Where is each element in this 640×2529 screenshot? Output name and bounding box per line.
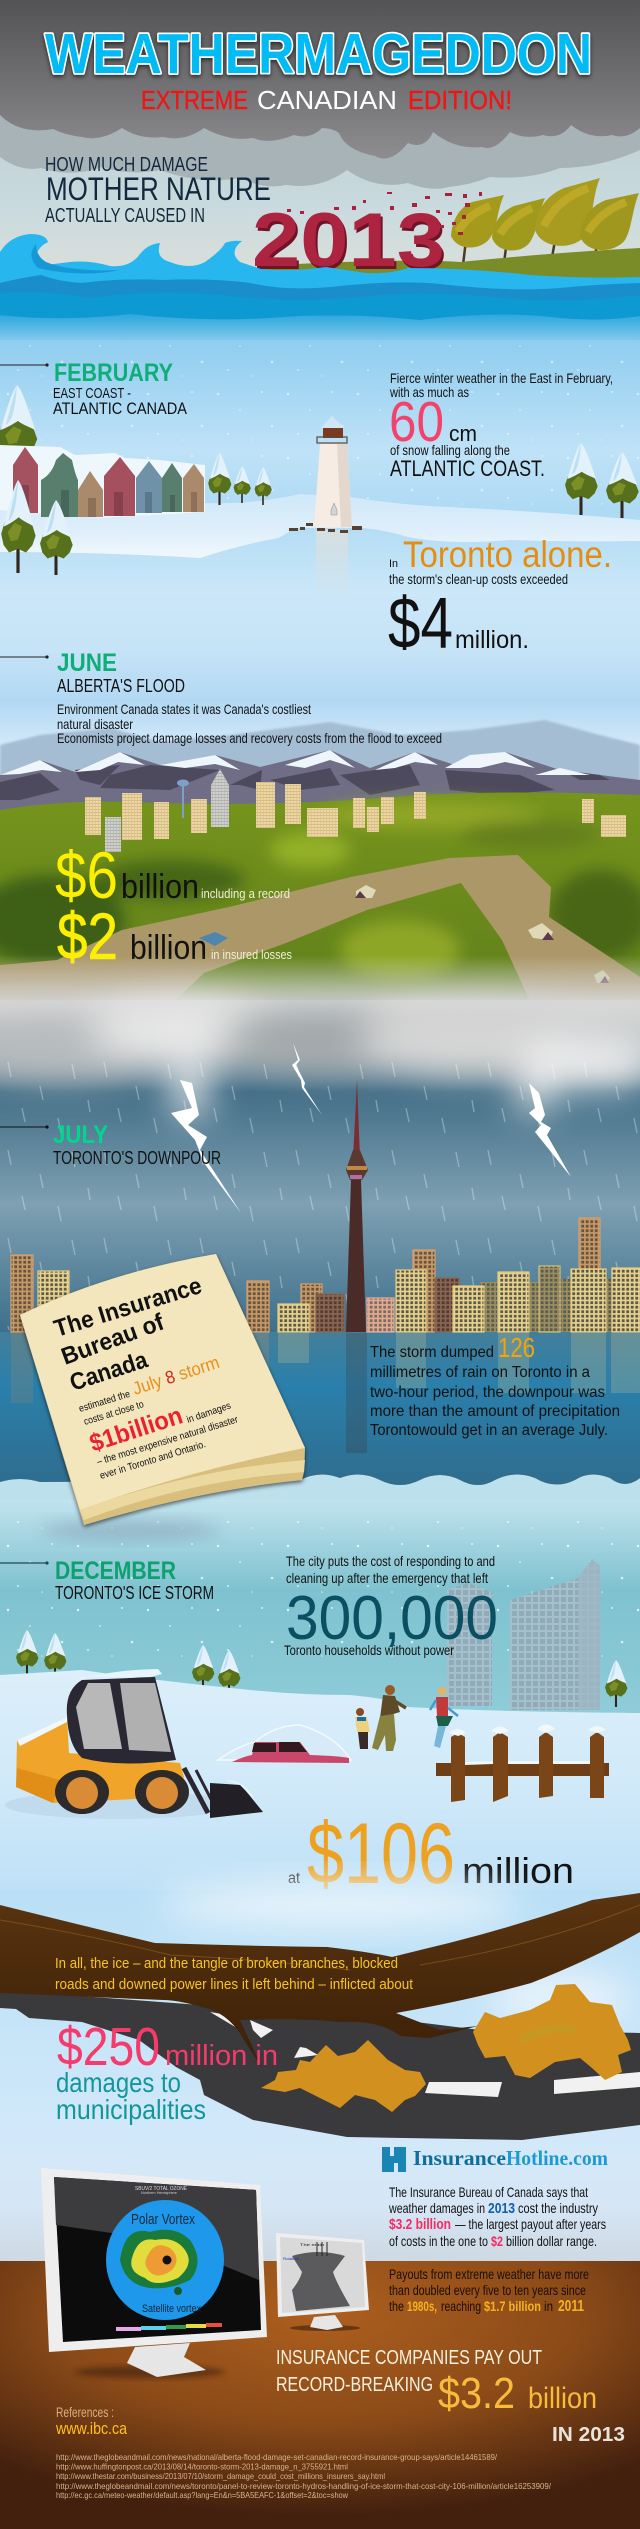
body text: IBC payout: 2013: [488, 2200, 515, 2217]
stat: $2 billion: billion: [130, 929, 207, 967]
subtitle: [141, 85, 512, 115]
stat: $6 billion: $6: [55, 838, 118, 912]
large monitor: polar vortex: [41, 2168, 267, 2378]
snow loader: [5, 1669, 263, 1819]
small monitor: vortex diagram: Rotation: [283, 2256, 299, 2261]
headline: record-breaking payout: INSURANCE COMPANIES PAY OUT: [276, 2347, 542, 2369]
road markings: [210, 2012, 640, 2097]
heading: December: DECEMBER: [55, 1557, 176, 1585]
flood water: [0, 1332, 640, 1485]
heading: July: JULY: [53, 1121, 108, 1149]
ozone map: [106, 2200, 224, 2320]
heading: February: EAST COAST -: [53, 385, 131, 402]
3D year 2013: 2013: [252, 198, 445, 283]
callout: 60 cm of snow: [389, 370, 613, 481]
callout: 60 cm of snow: cm: [449, 421, 477, 446]
stat: $2 billion: $2: [57, 899, 118, 973]
snowy trees: [16, 1630, 627, 1707]
source URLs: http://www.huffingtonpost.ca/2013/08/14/toronto-storm-2013-damage_n_3755921.html: [56, 2462, 348, 2472]
small monitor: vortex diagram: The main: [300, 2242, 324, 2247]
stat: $250 million: municipalities: [56, 2094, 206, 2125]
body text: IBC payout: billion dollar range.: [506, 2233, 597, 2249]
intro heading: ACTUALLY CAUSED IN: [45, 205, 205, 227]
stat: 300,000 households: 300,000: [286, 1584, 498, 1653]
callout: Toronto alone $4 million: million.: [455, 626, 529, 654]
heading: July: [0, 1121, 221, 1168]
orange leaf clumps: [261, 1984, 631, 2112]
stat: 300,000 households: Toronto households without power: [284, 1642, 454, 1658]
snowy trees left: [1, 453, 272, 575]
callout: 60 cm of snow: 60: [389, 390, 444, 454]
muddy flood river: [0, 855, 640, 1012]
source URLs: [56, 2452, 552, 2500]
stat: $6 billion: [55, 838, 290, 912]
wooden fence: [436, 1724, 609, 1802]
logo: InsuranceHotline.com: Hotline.com: [506, 2146, 608, 2170]
grass strip: [258, 248, 640, 300]
stat: 300,000 households: The city puts the cost of responding to and: [286, 1553, 495, 1569]
callout: 60 cm of snow: with as much as: [389, 384, 469, 400]
booklet text: estimated the: [78, 1389, 132, 1415]
callout: 60 cm of snow: of snow falling along the: [390, 442, 510, 458]
panel: February, East Coast: [0, 340, 640, 664]
callout: 60 cm of snow: ATLANTIC COAST.: [390, 456, 545, 481]
stat: $250 million: damages to: [56, 2067, 181, 2098]
stat: $106 million: million: [462, 1850, 574, 1891]
body text: costliest disaster: [57, 701, 442, 746]
subtitle: EDITION!: [408, 85, 512, 115]
body text: IBC payout: $3.2 billion: [389, 2216, 451, 2233]
stat: 126 millimetres: more than the amount of precipitation: [370, 1403, 620, 1420]
logo: InsuranceHotline.com: Insurance: [413, 2146, 506, 2170]
callout: Toronto alone $4 million: the storm's clean-up costs exceeded: [389, 571, 568, 587]
booklet text: ever in Toronto and Ontario.: [99, 1439, 207, 1482]
panel: header and storm clouds: [0, 0, 640, 345]
headline: record-breaking payout: [276, 2347, 625, 2446]
road: [0, 1990, 640, 2140]
body text: payouts doubled: than doubled every five to ten years since: [389, 2282, 586, 2298]
ocean waves: [0, 234, 640, 345]
snowfield: [0, 1670, 640, 1910]
dark cloud band: [0, 0, 640, 159]
colour scale: [116, 2323, 222, 2331]
headline: record-breaking payout: billion: [528, 2382, 597, 2415]
3D year 2013: 2013: [254, 201, 447, 286]
ozone map: Polar Vortex: [131, 2211, 195, 2228]
stat: $250 million: $250: [57, 2017, 160, 2077]
body text: payouts doubled: [389, 2266, 589, 2315]
booklet text: $1billion: [86, 1401, 186, 1458]
headline: record-breaking payout: $3.2: [438, 2369, 515, 2418]
heading: June: [0, 649, 185, 696]
family in the snow: [355, 1685, 458, 1751]
lighthouse: [289, 416, 362, 600]
text on branch: roads and downed power lines it left behind – inflicted about: [55, 1976, 414, 1993]
booklet shadow: [40, 1520, 220, 1540]
booklet text: Canada: [67, 1346, 152, 1397]
body text: IBC payout: cost the industry: [518, 2200, 598, 2216]
body text: IBC payout: $2: [491, 2233, 503, 2249]
CN Tower: [346, 1080, 368, 1332]
source URLs: http://ec.gc.ca/meteo-weather/default.asp?lang=En&n=5BA5EAFC-1&offset=2&toc=show: [56, 2490, 349, 2500]
storm clouds: [0, 1000, 640, 1118]
ozone map: Satellite vortex: [142, 2303, 201, 2315]
text on branch: [55, 1955, 414, 1993]
stat: 126 millimetres: millimetres of rain on Toronto in a: [370, 1364, 590, 1381]
booklet text: [51, 1272, 240, 1482]
body text: payouts doubled: in: [544, 2298, 553, 2314]
snowy ground: [0, 494, 640, 558]
stat: 126 millimetres: 126: [498, 1332, 535, 1363]
stat: 126 millimetres: Torontowould get in an average July.: [370, 1422, 608, 1439]
body text: payouts doubled: the: [389, 2298, 404, 2314]
body text: payouts doubled: 1980s,: [407, 2298, 437, 2314]
heading: February: FEBRUARY: [54, 359, 173, 387]
forest texture: [0, 801, 640, 980]
snow-buried car: [218, 1725, 351, 1763]
booklet text: Bureau of: [58, 1308, 168, 1371]
booklet text: costs at close to: [83, 1399, 146, 1428]
heading: December: TORONTO'S ICE STORM: [55, 1583, 214, 1603]
intro heading: MOTHER NATURE: [46, 171, 271, 207]
booklet text: The Insurance: [51, 1272, 205, 1343]
tree branch: [0, 1893, 640, 2068]
headline: record-breaking payout: RECORD-BREAKING: [276, 2374, 433, 2396]
source URLs: http://www.theglobeandmail.com/news/national/alberta-flood-damage-set-canadian-record-insurance-group-says/article14461589/: [56, 2452, 498, 2462]
headline: record-breaking payout: IN 2013: [552, 2424, 625, 2446]
stat: 300,000 households: cleaning up after the emergency that left: [286, 1570, 488, 1586]
row of coloured houses: [0, 445, 205, 518]
panel: fallen branch and blocked road: [0, 1883, 640, 2152]
heading: December: [0, 1557, 214, 1603]
panel: June, Alberta flood: [0, 649, 640, 1012]
glass towers: [447, 1559, 600, 1710]
body text: costliest disaster: Economists project damage losses and recovery costs from the flood to exceed: [57, 730, 442, 746]
subtitle: EXTREME: [141, 85, 248, 115]
text on branch: In all, the ice – and the tangle of broken branches, blocked: [55, 1955, 398, 1972]
panel: July, Toronto downpour: [0, 955, 640, 1525]
large monitor: polar vortex: SBUV/2 TOTAL OZONE: [135, 2186, 188, 2192]
blowing petals: [287, 192, 482, 235]
stat: 126 millimetres: [370, 1332, 620, 1439]
body text: payouts doubled: 2011: [558, 2298, 584, 2315]
July lower water: [0, 1474, 640, 1525]
distant mountains: [0, 720, 640, 810]
windblown trees: [451, 178, 639, 265]
back cloud layer: [0, 100, 640, 189]
references: [55, 2404, 127, 2438]
panel: insurance payouts footer: [0, 2125, 640, 2529]
rain: [0, 1050, 640, 1330]
booklet: Insurance Bureau of Canada: [20, 1254, 305, 1525]
snowy trees right: [565, 443, 639, 518]
stat: $250 million: million in: [165, 2040, 278, 2072]
Toronto skyline buildings: [11, 1218, 640, 1332]
stat: 126 millimetres: two-hour period, the downpour was: [370, 1384, 605, 1401]
stat: $106 million: at: [288, 1870, 300, 1887]
back-row snowy tree: [0, 385, 37, 475]
stat: 126 millimetres: The storm dumped: [370, 1344, 494, 1361]
source URLs: http://www.theglobeandmail.com/news/toronto/panel-to-review-toronto-hydros-handling-of-ice-storm-that-cost-city-106-million/article16253909/: [56, 2481, 552, 2491]
body text: payouts doubled: reaching: [441, 2298, 481, 2314]
body text: costliest disaster: natural disaster: [57, 716, 133, 732]
booklet text: in damages: [185, 1400, 232, 1426]
panel: December, ice storm: [0, 1500, 640, 1910]
callout: Toronto alone $4 million: [388, 534, 612, 664]
stat: $106 million: $106: [307, 1806, 455, 1902]
snow-capped mountain range: [0, 750, 640, 812]
large monitor: polar vortex: Northern Hemisphere: [141, 2190, 178, 2195]
callout: Toronto alone $4 million: In: [389, 558, 398, 570]
stat: $6 billion: including a record: [201, 886, 290, 901]
intro heading: [45, 154, 271, 227]
body text: payouts doubled: $1.7 billion: [484, 2298, 541, 2314]
heading: February: [0, 359, 188, 418]
body text: IBC payout: weather damages in: [388, 2200, 485, 2216]
city skyline: [85, 769, 626, 852]
source URLs: http://www.thestar.com/business/2013/07/10/storm_damage_could_cost_millions_insurers_say.html: [56, 2471, 385, 2481]
heading: February: ATLANTIC CANADA: [53, 399, 188, 418]
logo: InsuranceHotline.com: [382, 2146, 608, 2172]
stat: $106 million: [288, 1806, 574, 1902]
stat: $250 million: [56, 2017, 278, 2125]
stat: $2 billion: [57, 899, 292, 973]
green valley: [0, 792, 640, 1012]
callout: Toronto alone $4 million: $4: [388, 584, 453, 664]
body text: IBC payout: of costs in the one to: [389, 2233, 488, 2249]
references: www.ibc.ca: [55, 2419, 127, 2438]
stat: $2 billion: in insured losses: [211, 947, 292, 962]
body text: IBC payout: [388, 2184, 606, 2249]
subtitle: CANADIAN: [257, 85, 397, 115]
body text: costliest disaster: Environment Canada states it was Canada's costliest: [57, 701, 311, 717]
booklet text: – the most expensive natural disaster: [96, 1414, 240, 1468]
references: References :: [56, 2404, 114, 2420]
city skyline reflections: [11, 1333, 640, 1453]
booklet text: July 8 storm: [130, 1352, 222, 1399]
stat: $6 billion: billion: [121, 868, 199, 906]
heading: July: TORONTO'S DOWNPOUR: [53, 1148, 221, 1168]
heading: June: ALBERTA'S FLOOD: [57, 676, 185, 696]
intro heading: HOW MUCH DAMAGE: [45, 154, 208, 176]
heading: June: JUNE: [57, 649, 117, 677]
small monitor: vortex diagram: [276, 2233, 369, 2331]
lightning bolts: [171, 1043, 571, 1213]
callout: Toronto alone $4 million: Toronto alone.: [403, 534, 612, 575]
stat: 300,000 households: [284, 1553, 498, 1658]
flooded houses: [199, 885, 610, 983]
